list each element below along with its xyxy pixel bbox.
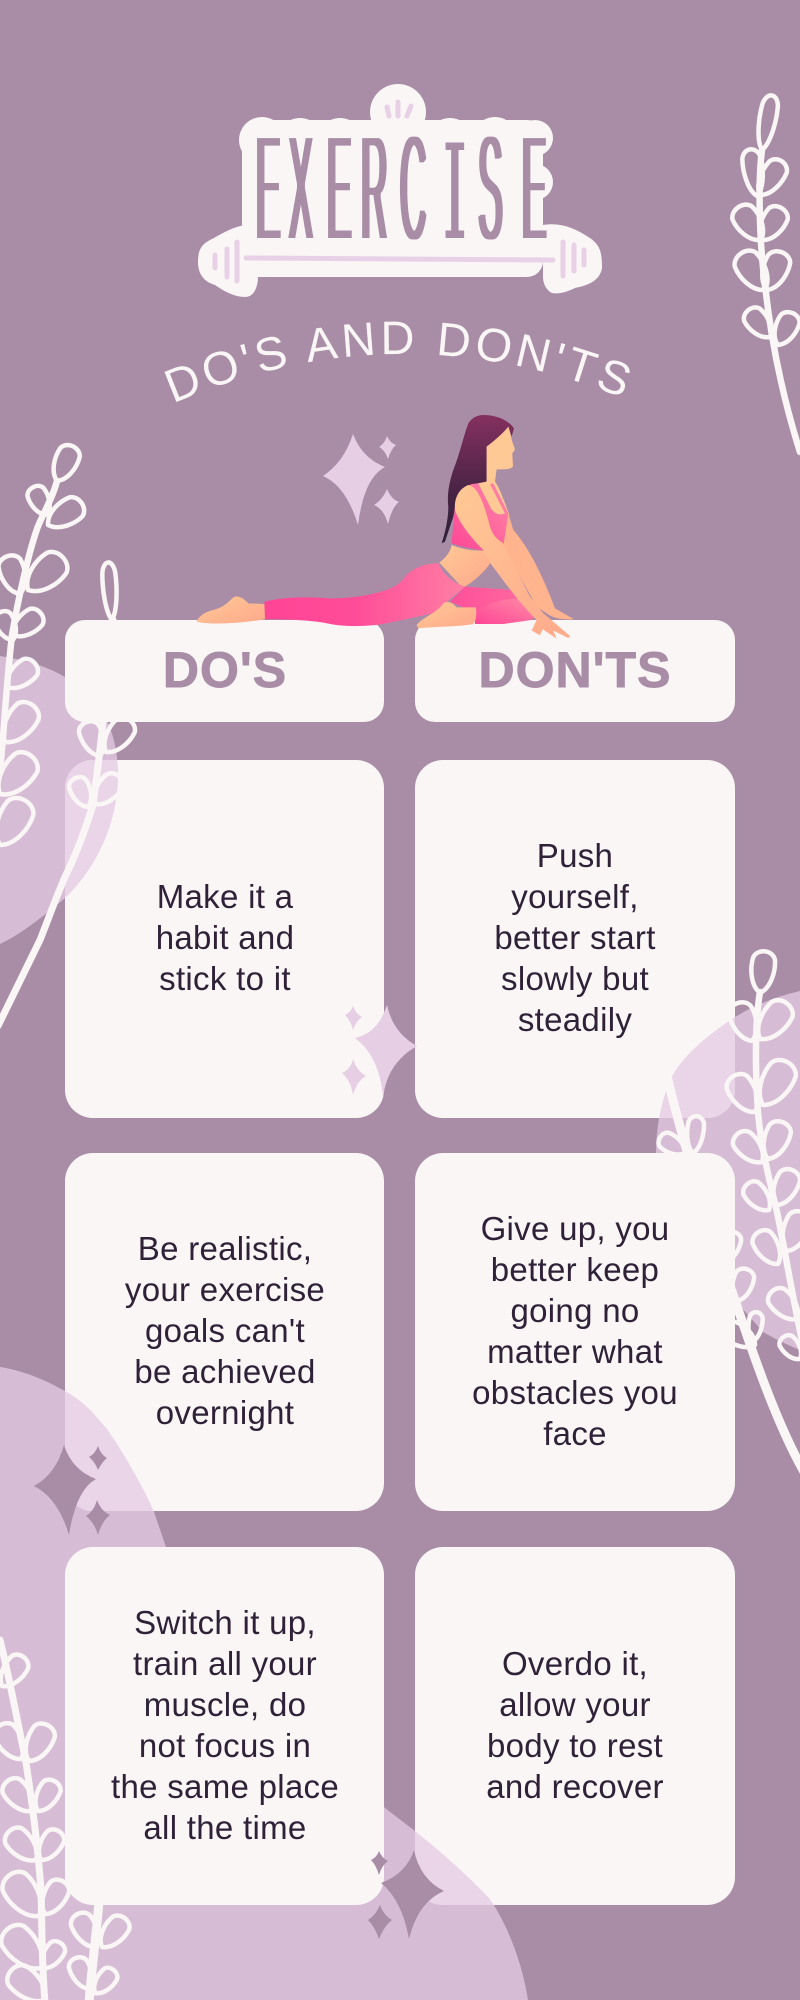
title: EXERCISE <box>256 105 546 285</box>
blob tint over do card 2 <box>65 1391 154 1511</box>
far arm <box>503 513 574 619</box>
text: don't 2: Give up, you <box>481 1210 669 1247</box>
panel: do's header <box>65 620 384 722</box>
icon: sparkles on left <box>34 1445 110 1535</box>
plant: bottom small sprig <box>66 1900 134 2000</box>
text: do 1: Make it a <box>157 878 294 915</box>
icon: top sparkles <box>323 434 399 525</box>
text: don't 3: Overdo it, <box>502 1645 648 1682</box>
text: do 3: Switch it up, <box>134 1604 316 1641</box>
near arm and hand <box>455 485 570 639</box>
icon: sparkles on first card <box>342 1005 417 1098</box>
text: don't 1: Push <box>537 837 613 874</box>
text: don't 3 <box>486 1645 664 1805</box>
blob tint over don't card 1 <box>659 1017 735 1118</box>
blob tint over don't card 3 <box>415 1831 494 1905</box>
text: do 3: train all your <box>133 1645 317 1682</box>
blob: lower left <box>0 1367 528 2000</box>
text: don't 1: steadily <box>518 1001 632 1038</box>
icon: sparkles at bottom <box>368 1850 444 1939</box>
text: do 3: the same place <box>111 1768 339 1805</box>
panel: don't card 3 <box>415 1547 735 1905</box>
text: don't 2 <box>472 1210 678 1452</box>
illustration: stretching woman <box>197 415 574 639</box>
face, neck and chest <box>457 427 515 550</box>
text: do 2: Be realistic, <box>138 1230 312 1267</box>
text: don't 1: yourself, <box>511 878 639 915</box>
plant: upper left sprig <box>0 442 89 852</box>
text: don't 1: slowly but <box>501 960 649 997</box>
plant: long stem behind don't cards <box>655 1080 800 1470</box>
text: don't 2: going no <box>510 1292 640 1329</box>
text: don't 2: matter what <box>487 1333 663 1370</box>
text: do 2: your exercise <box>125 1271 325 1308</box>
rear leg and hip <box>264 563 465 626</box>
panel: do card 1 <box>65 760 384 1118</box>
sports top <box>452 483 509 551</box>
text: do 1: stick to it <box>159 960 291 997</box>
text: do 2 <box>125 1230 325 1431</box>
text: don't 2: obstacles you <box>472 1374 678 1411</box>
text: do 2: goals can't <box>145 1312 305 1349</box>
heading: don'ts: DON'TS <box>479 642 671 698</box>
plant: right sprig <box>722 950 800 1364</box>
text: don't 3: and recover <box>486 1768 664 1805</box>
plant: top right sprig <box>728 94 800 452</box>
text: don't 1: better start <box>494 919 656 956</box>
plant: lower left sprig <box>0 1640 73 2000</box>
heading: do's: DO'S <box>163 642 287 698</box>
hair <box>442 415 514 543</box>
text: do 3: all the time <box>143 1809 307 1846</box>
panel: don't card 1 <box>415 760 735 1118</box>
blob: right <box>656 991 800 1350</box>
blob: upper left <box>0 656 118 944</box>
text: do 1: habit and <box>156 919 294 956</box>
panel: don't card 2 <box>415 1153 735 1511</box>
text: don't 2: face <box>543 1415 607 1452</box>
subtitle: DO'S AND DON'TS <box>164 322 630 402</box>
text: don't 3: allow your <box>499 1686 651 1723</box>
text: do 1 <box>156 878 294 997</box>
front thigh highlight <box>475 599 533 624</box>
icon: barbell <box>215 102 584 281</box>
text: do 3: not focus in <box>139 1727 311 1764</box>
plant: sprig behind do card <box>0 562 139 1026</box>
text: do 2: be achieved <box>134 1353 316 1390</box>
rear foot <box>197 597 265 623</box>
panel: do card 3 <box>65 1547 384 1905</box>
blob tint over do card 1 <box>65 760 118 898</box>
text: don't 3: body to rest <box>487 1727 663 1764</box>
text: do 3 <box>111 1604 339 1846</box>
midriff <box>439 545 491 587</box>
text: don't 1 <box>494 837 656 1038</box>
text: don't 2: better keep <box>491 1251 659 1288</box>
sticker: title background <box>198 84 602 297</box>
text: do 2: overnight <box>156 1394 294 1431</box>
front leg <box>450 587 533 624</box>
panel: don'ts header <box>415 620 735 722</box>
front foot <box>417 602 476 628</box>
panel: do card 2 <box>65 1153 384 1511</box>
text: do 3: muscle, do <box>144 1686 306 1723</box>
